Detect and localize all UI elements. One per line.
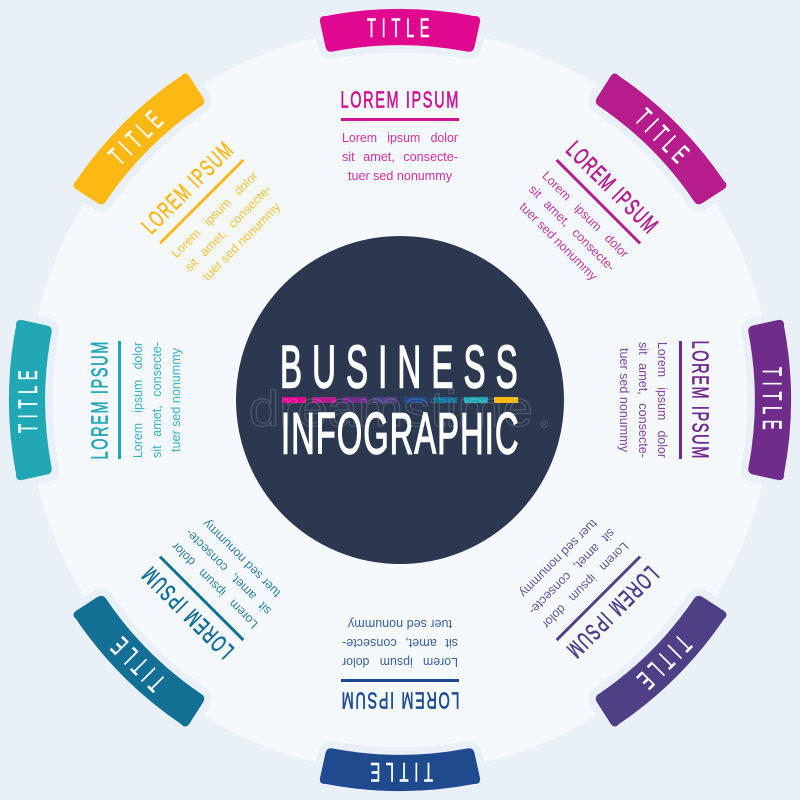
segment: blue bottom [320,617,480,791]
segment: indigo lower right: tuer sed nonummy [516,517,600,601]
segment: deep teal lower left [67,497,303,733]
watermark: dreamstime [249,381,533,437]
segment: deep teal lower left: LOREM IPSUM [137,561,239,663]
segment: purple right: Lorem ipsum dolor [655,342,669,458]
segment: magenta top [320,9,480,183]
segment: magenta top: tuer sed nonummy [348,169,453,183]
segment: purple-magenta upper right: TITLE [629,102,695,169]
segment: indigo lower right: TITLE [631,629,698,695]
segment: purple right: tuer sed nonummy [617,348,631,453]
segment: teal left: LOREM IPSUM [87,342,114,460]
segment: yellow upper left: Lorem ipsum dolor [169,169,261,261]
segment: purple right: LOREM IPSUM [686,340,713,458]
segment: teal left [9,320,183,480]
segment: purple-magenta upper right: sit amet, consecte- [526,182,618,274]
segment: blue bottom: Lorem ipsum dolor [342,655,458,669]
segment: blue bottom: LOREM IPSUM [342,686,460,713]
segment: purple-magenta upper right [497,67,733,303]
colour stripe row [282,397,518,403]
segment: deep teal lower left: tuer sed nonummy [199,516,283,600]
segment: blue bottom: sit amet, consecte- [342,636,458,650]
segment: deep teal lower left: sit amet, consecte- [182,526,274,618]
segment: indigo lower right: sit amet, consecte- [526,526,618,618]
central circle [236,236,564,564]
segment: teal left: TITLE [12,370,43,433]
segment: purple right: sit amet, consecte- [636,342,650,458]
segment: purple-magenta upper right: LOREM IPSUM [561,137,663,239]
segment: teal left: sit amet, consecte- [150,342,164,458]
segment: yellow upper left: TITLE [102,105,169,171]
segment: teal left: Lorem ipsum dolor [131,342,145,458]
segment: magenta top: TITLE [367,12,430,43]
segment: yellow upper left: LOREM IPSUM [137,137,239,239]
segment: purple-magenta upper right: Lorem ipsum dolor [539,169,631,261]
segment: yellow upper left: sit amet, consecte- [182,182,274,274]
segment: indigo lower right: LOREM IPSUM [561,561,663,663]
segment: magenta top: LOREM IPSUM [340,87,458,114]
watermark mark: ® [540,419,548,431]
segment: deep teal lower left: Lorem ipsum dolor [169,539,261,631]
heading: BUSINESS: BUSINESS [280,334,518,401]
segment: yellow upper left [67,67,303,303]
segment: indigo lower right [497,497,733,733]
segment: purple right [617,320,791,480]
segment: teal left: tuer sed nonummy [169,347,183,452]
segment: purple-magenta upper right: tuer sed nonummy [517,200,601,284]
segment: purple right: TITLE [757,367,788,430]
segment: blue bottom: tuer sed nonummy [347,617,452,631]
segment: blue bottom: TITLE [370,757,433,788]
segment: yellow upper left: tuer sed nonummy [200,199,284,283]
heading: INFOGRAPHIC: INFOGRAPHIC [281,400,518,466]
segment: magenta top: Lorem ipsum dolor [342,131,458,145]
segment: deep teal lower left: TITLE [105,631,171,698]
segment: magenta top: sit amet, consecte- [342,150,458,164]
segment: indigo lower right: Lorem ipsum dolor [539,539,631,631]
